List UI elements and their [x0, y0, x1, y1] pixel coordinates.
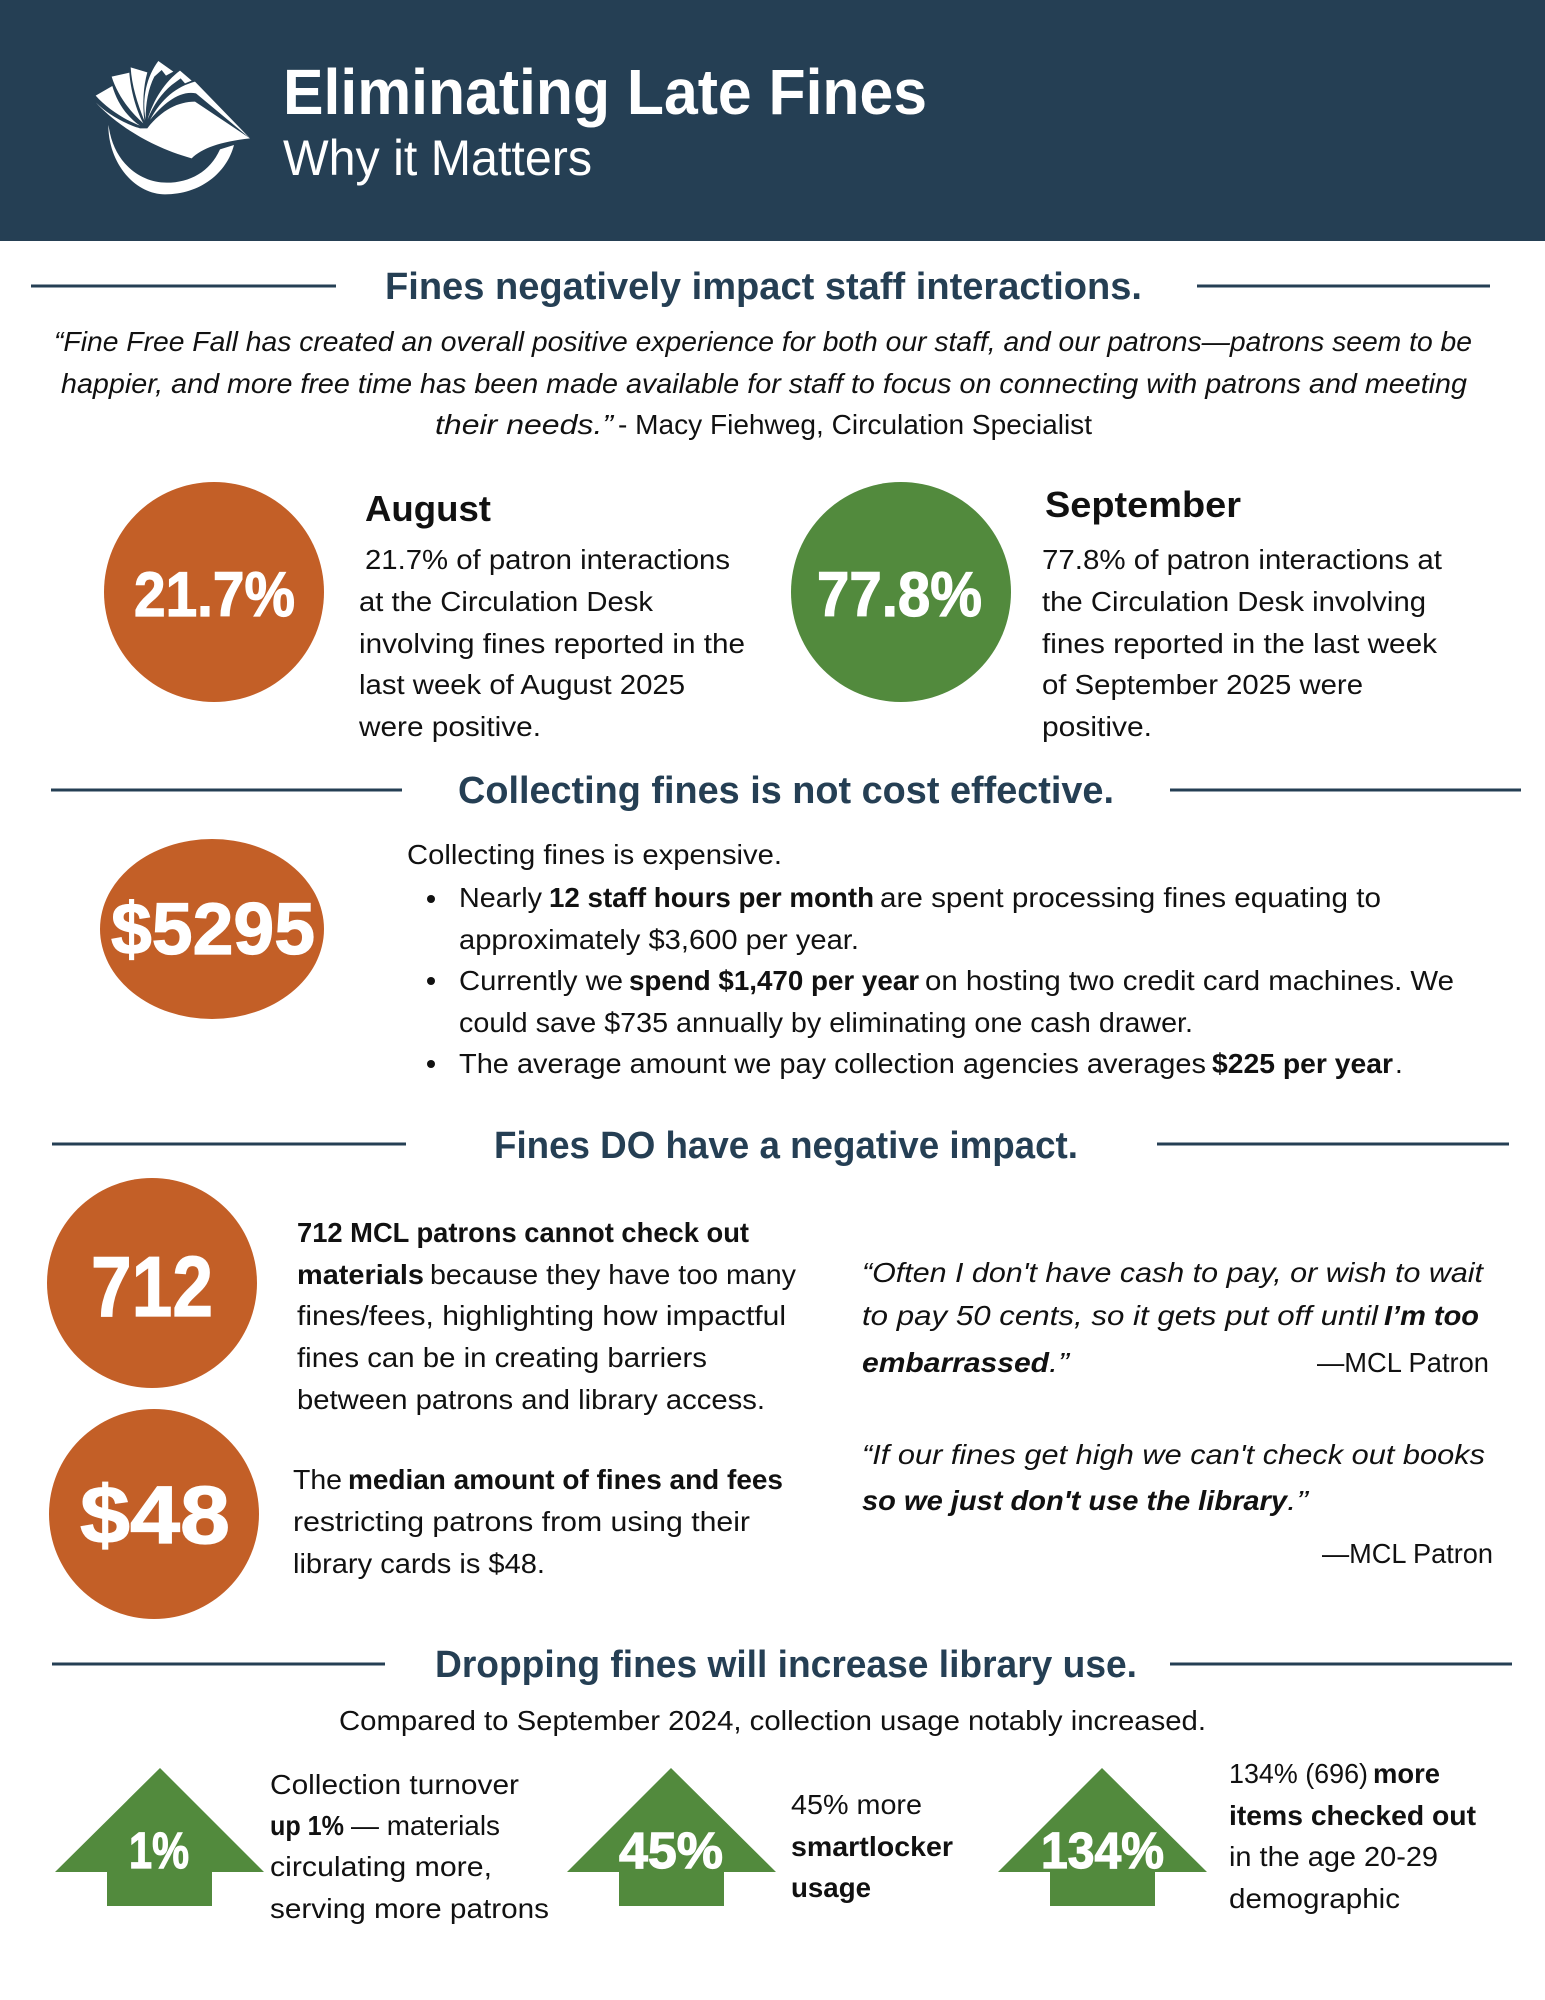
cost bullet list: approximately $3,600 per year.	[459, 924, 859, 955]
cost bullet list: spend $1,470 per year	[629, 965, 919, 996]
August text block: involving fines reported in the	[359, 628, 745, 659]
September text block: 77.8% of patron interactions at	[1042, 544, 1442, 575]
712 text block: 712 MCL patrons cannot check out	[297, 1217, 749, 1248]
cost bullet list: Currently we	[459, 965, 623, 996]
staff quote	[54, 326, 1472, 440]
September text block: the Circulation Desk involving	[1042, 586, 1426, 617]
collection turnover text: — materials	[351, 1810, 500, 1841]
cost bullet list: Nearly	[459, 882, 542, 913]
stat ellipse: $5295	[100, 839, 324, 1019]
icon: open book logo	[96, 61, 250, 194]
staff quote: happier, and more free time has been made available for staff to focus on connecting with patrons and meeting	[61, 368, 1467, 399]
collection turnover text: up 1%	[270, 1810, 344, 1841]
stat circle: 77.8% September	[791, 482, 1011, 702]
stat circle: 21.7% August	[104, 482, 324, 702]
smartlocker text	[791, 1789, 953, 1903]
age demographic text: in the age 20-29	[1229, 1841, 1438, 1872]
smartlocker text: usage	[791, 1872, 871, 1903]
collection turnover text	[270, 1769, 549, 1924]
arrow: 45%: 45%	[619, 1822, 723, 1879]
staff quote: - Macy Fiehweg, Circulation Specialist	[618, 409, 1092, 440]
smartlocker text: 45% more	[791, 1789, 922, 1820]
patron quote 2: so we just don't use the library	[862, 1485, 1288, 1516]
$48 text block: The	[293, 1464, 342, 1495]
cost bullet list: could save $735 annually by eliminating one cash drawer.	[459, 1007, 1193, 1038]
stat circle: 21.7% August: 21.7%	[134, 560, 295, 630]
patron quote 1: “Often I don't have cash to pay, or wish to wait	[862, 1257, 1484, 1288]
patron quote 1: to pay 50 cents, so it gets put off until	[862, 1300, 1379, 1331]
age demographic text: more	[1373, 1758, 1440, 1789]
arrow: 1%: 1%	[129, 1822, 189, 1879]
cost bullet list: Collecting fines is expensive.	[407, 839, 782, 870]
cost bullet list: $225 per year	[1212, 1048, 1393, 1079]
subtitle: Why it Matters	[283, 130, 592, 186]
section 4 intro: Compared to September 2024, collection usage notably increased.	[339, 1705, 1206, 1736]
patron quote 2: —MCL Patron	[1322, 1538, 1493, 1569]
$48 text block: restricting patrons from using their	[293, 1506, 750, 1537]
collection turnover text: circulating more,	[270, 1851, 492, 1882]
stat circle: 712	[47, 1178, 257, 1388]
712 text block	[297, 1217, 796, 1415]
712 text block: because they have too many	[430, 1259, 796, 1290]
patron quote 1: I’m too	[1384, 1300, 1479, 1331]
header banner	[0, 0, 1545, 241]
cost bullet list: are spent processing fines equating to	[880, 882, 1381, 913]
August text block: were positive.	[358, 711, 541, 742]
arrow: 1%	[55, 1768, 264, 1906]
patron quote 1	[862, 1257, 1489, 1378]
August text block: 21.7% of patron interactions	[365, 544, 730, 575]
cost bullet list: .	[1395, 1048, 1403, 1079]
September text block	[1042, 484, 1442, 742]
August text block: at the Circulation Desk	[359, 586, 654, 617]
stat circle: 712: 712	[91, 1240, 213, 1335]
age demographic text: items checked out	[1229, 1800, 1476, 1831]
collection turnover text: Collection turnover	[270, 1769, 519, 1800]
August text block	[358, 488, 745, 742]
stat circle: $48	[49, 1409, 259, 1619]
age demographic text: demographic	[1229, 1883, 1400, 1914]
collection turnover text: serving more patrons	[270, 1893, 549, 1924]
August text block: August	[365, 488, 491, 529]
$48 text block	[293, 1464, 783, 1579]
cost bullet list: The average amount we pay collection agencies averages	[459, 1048, 1206, 1079]
section 1 heading: staff interactions: Fines negatively impact staff interactions.	[385, 266, 1142, 308]
712 text block: between patrons and library access.	[297, 1384, 765, 1415]
stat ellipse: $5295: $5295	[111, 889, 315, 970]
patron quote 2: .”	[1287, 1485, 1310, 1516]
staff quote: their needs.”	[435, 409, 615, 440]
section 4 heading: library use: Dropping fines will increase library use.	[435, 1644, 1137, 1686]
patron quote 2	[862, 1439, 1493, 1569]
section 3 heading: negative impact: Fines DO have a negative impact.	[494, 1125, 1078, 1167]
patron quote 1: embarrassed	[862, 1347, 1050, 1378]
September text block: September	[1045, 484, 1241, 525]
$48 text block: library cards is $48.	[293, 1548, 545, 1579]
staff quote: “Fine Free Fall has created an overall positive experience for both our staff, and our patrons—patrons seem to be	[54, 326, 1472, 357]
712 text block: materials	[297, 1259, 424, 1290]
cost bullet list	[407, 839, 1454, 1079]
September text block: fines reported in the last week	[1042, 628, 1438, 659]
September text block: of September 2025 were	[1042, 669, 1363, 700]
stat circle: 77.8% September: 77.8%	[817, 560, 982, 630]
arrow: 134%: 134%	[1041, 1822, 1164, 1879]
stat circle: $48: $48	[80, 1470, 230, 1561]
$48 text block: median amount of fines and fees	[348, 1464, 783, 1495]
patron quote 1: —MCL Patron	[1317, 1347, 1489, 1378]
section 2 heading: cost: Collecting fines is not cost effective.	[458, 770, 1114, 812]
August text block: last week of August 2025	[359, 669, 685, 700]
arrow: 45%	[567, 1768, 776, 1906]
age demographic text	[1229, 1758, 1476, 1914]
age demographic text: 134% (696)	[1229, 1758, 1368, 1789]
title: Eliminating Late Fines	[283, 56, 927, 128]
arrow: 134%	[998, 1768, 1207, 1906]
712 text block: fines can be in creating barriers	[297, 1342, 707, 1373]
smartlocker text: smartlocker	[791, 1831, 953, 1862]
712 text block: fines/fees, highlighting how impactful	[297, 1300, 786, 1331]
patron quote 2: “If our fines get high we can't check out books	[862, 1439, 1485, 1470]
patron quote 1: .”	[1049, 1347, 1071, 1378]
cost bullet list: 12 staff hours per month	[549, 882, 874, 913]
cost bullet list: on hosting two credit card machines. We	[925, 965, 1454, 996]
September text block: positive.	[1042, 711, 1152, 742]
